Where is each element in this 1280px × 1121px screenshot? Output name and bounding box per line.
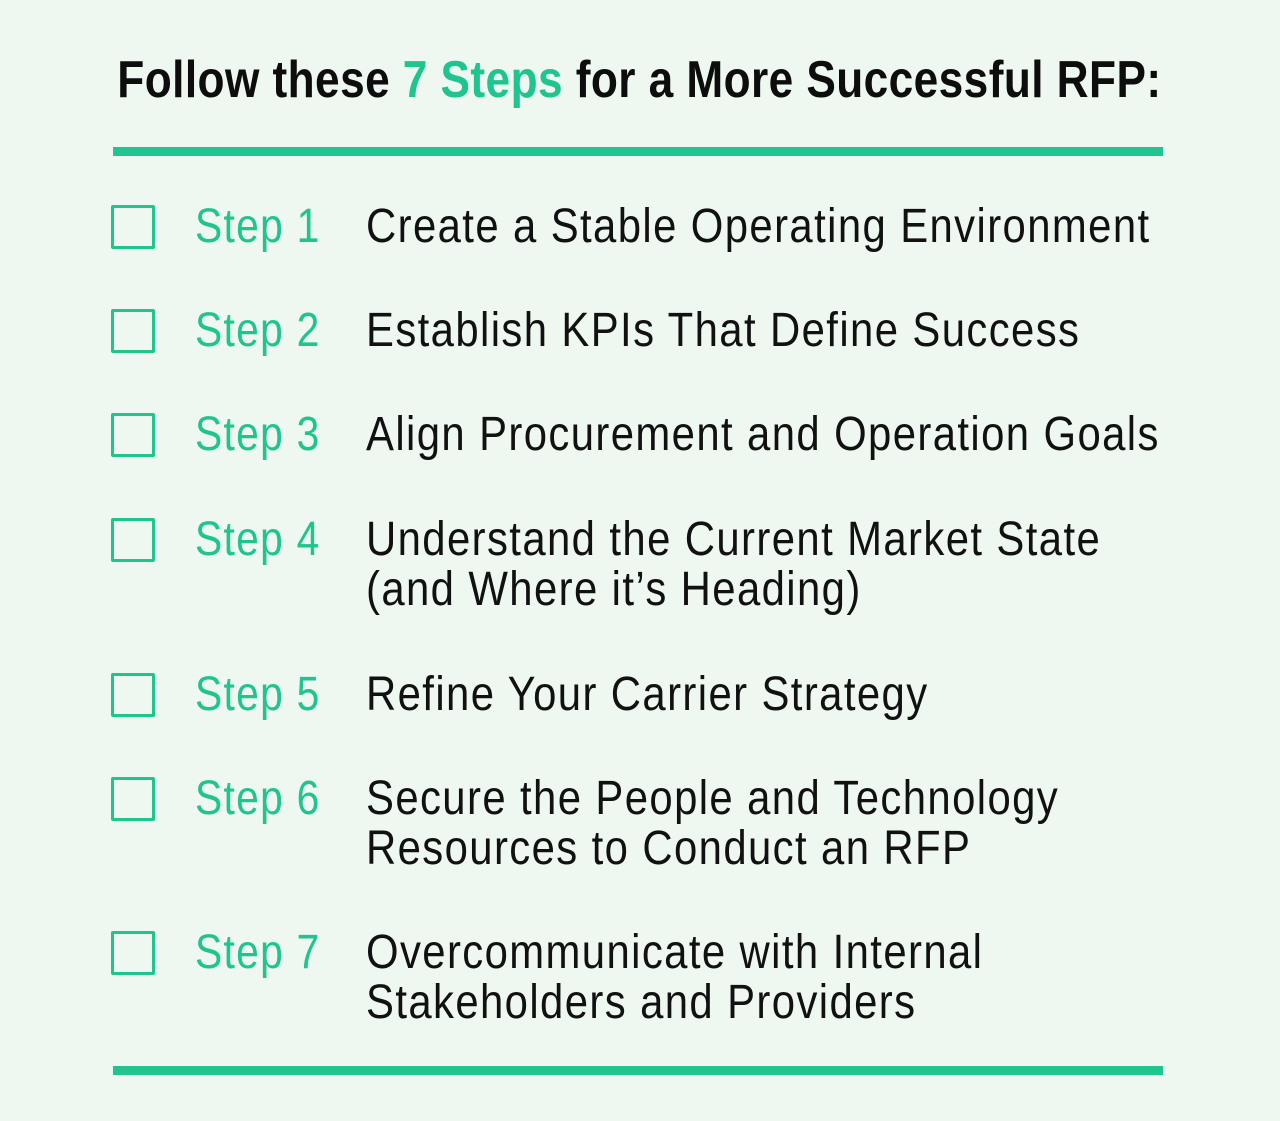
step 4 text: Understand the Current Market State	[366, 513, 1101, 566]
step 4 text	[366, 513, 1101, 616]
step 7 row	[111, 926, 983, 1029]
step 3 text: Align Procurement and Operation Goals	[366, 408, 1160, 461]
step 3 row	[111, 408, 1160, 461]
checkbox 1	[111, 205, 155, 249]
step 6 text	[366, 772, 1059, 875]
step 3 label: Step 3	[195, 408, 321, 461]
step 7 text: Overcommunicate with Internal	[366, 926, 983, 979]
step 7 text: Stakeholders and Providers	[366, 976, 916, 1029]
checkbox 2	[111, 309, 155, 353]
checkbox 4	[111, 518, 155, 562]
step 1 row	[111, 200, 1151, 253]
step 6 row	[111, 772, 1059, 875]
step 7 label: Step 7	[195, 926, 321, 979]
step 6 text: Secure the People and Technology	[366, 772, 1059, 825]
step 5 row	[111, 668, 929, 721]
title: Follow these 7 Steps for a More Successful RFP:	[117, 51, 1161, 109]
step 5 label: Step 5	[195, 668, 321, 721]
step 1 label: Step 1	[195, 200, 321, 253]
checkbox 7	[111, 931, 155, 975]
step 1 text: Create a Stable Operating Environment	[366, 200, 1151, 253]
step 2 label: Step 2	[195, 304, 321, 357]
step 4 text: (and Where it’s Heading)	[366, 563, 862, 616]
step 6 text: Resources to Conduct an RFP	[366, 822, 971, 875]
step 4 label: Step 4	[195, 513, 321, 566]
step 2 row	[111, 304, 1080, 357]
checkbox 5	[111, 673, 155, 717]
checkbox 6	[111, 777, 155, 821]
checkbox 3	[111, 413, 155, 457]
step 4 row	[111, 513, 1101, 616]
step 2 text: Establish KPIs That Define Success	[366, 304, 1080, 357]
step 7 text	[366, 926, 983, 1029]
step 5 text: Refine Your Carrier Strategy	[366, 668, 929, 721]
step 6 label: Step 6	[195, 772, 321, 825]
